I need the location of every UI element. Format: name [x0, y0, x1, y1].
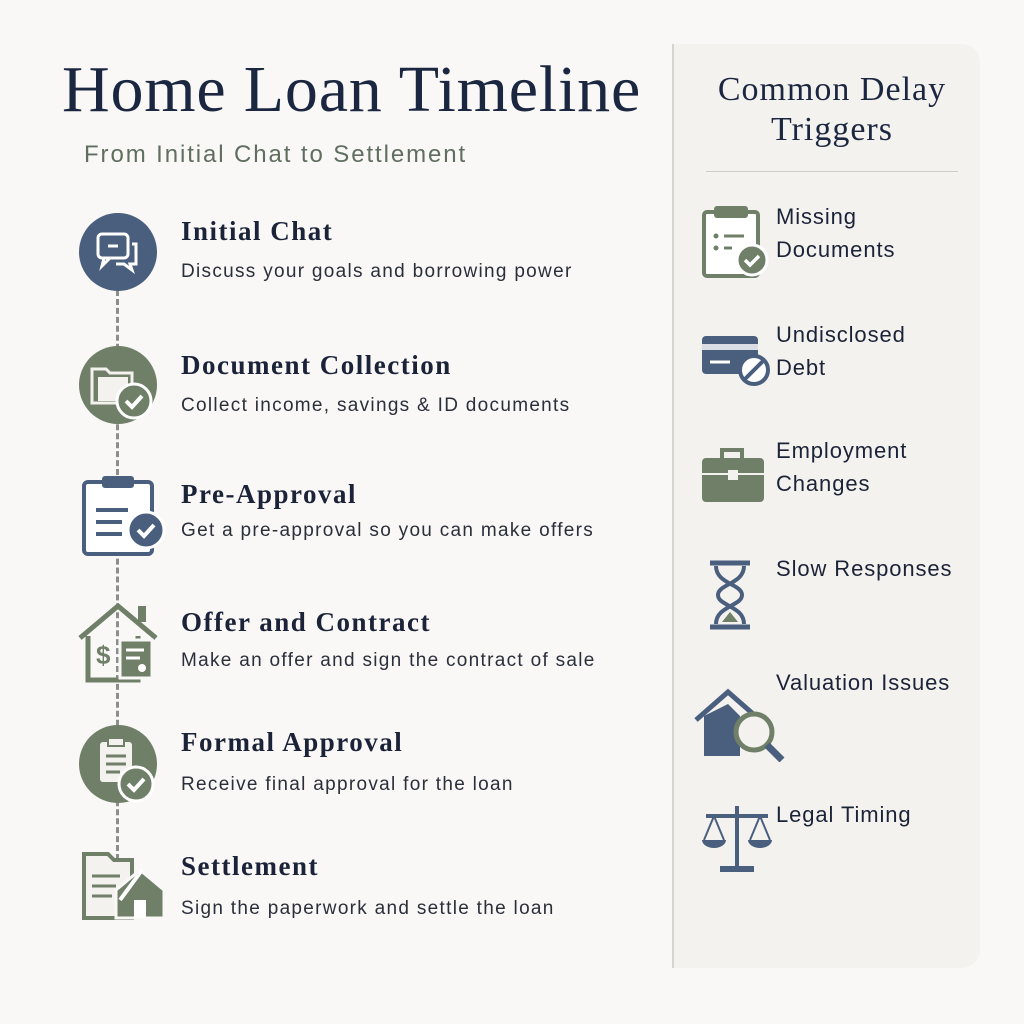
icon: house with dollar	[78, 602, 158, 682]
step: initial chat: Discuss your goals and borrowing power	[181, 261, 573, 282]
step: settlement: Sign the paperwork and settle the loan	[181, 898, 555, 919]
panel heading: Common Delay	[718, 71, 946, 108]
step: pre-approval	[82, 476, 594, 556]
step: formal approval	[79, 725, 514, 803]
trigger: slow responses: Slow Responses	[776, 556, 952, 581]
trigger: undisclosed debt	[702, 322, 906, 386]
step: offer and contract: Offer and Contract	[181, 607, 431, 637]
step: pre-approval: Pre-Approval	[181, 479, 357, 509]
icon: clipboard	[702, 206, 768, 278]
trigger: undisclosed debt: Debt	[776, 355, 826, 380]
icon: briefcase	[702, 448, 764, 502]
trigger: legal timing	[702, 802, 912, 872]
icon: hourglass	[710, 560, 750, 630]
step: settlement: Settlement	[181, 851, 319, 881]
trigger: employment changes	[702, 438, 907, 502]
step: offer and contract: Make an offer and sign the contract of sale	[181, 650, 596, 671]
step: offer and contract	[78, 602, 596, 682]
trigger: missing documents: Missing	[776, 204, 857, 229]
icon: document check	[79, 725, 157, 803]
icon: scales	[702, 806, 772, 872]
title: Home Loan Timeline	[62, 53, 641, 126]
step: document collection	[79, 346, 570, 424]
panel: common delay triggers	[672, 44, 980, 968]
icon: card with block	[702, 336, 770, 386]
icon: house with dollar: $	[96, 640, 111, 670]
icon: house with magnifier	[694, 688, 784, 762]
trigger: slow responses	[710, 556, 952, 630]
step: document collection: Document Collection	[181, 350, 452, 380]
step: document collection: Collect income, savings & ID documents	[181, 395, 570, 416]
icon: folder check	[79, 346, 157, 424]
trigger: legal timing: Legal Timing	[776, 802, 912, 827]
trigger: missing documents: Documents	[776, 237, 895, 262]
panel heading	[718, 71, 946, 148]
step: initial chat: Initial Chat	[181, 216, 333, 246]
step: settlement	[82, 851, 555, 920]
timeline connector	[116, 290, 119, 860]
icon: chat	[79, 213, 157, 291]
icon: clipboard check	[82, 476, 162, 556]
trigger: employment changes: Changes	[776, 471, 870, 496]
trigger: employment changes: Employment	[776, 438, 907, 463]
panel heading: Triggers	[771, 111, 893, 148]
icon: papers and house	[82, 852, 162, 920]
step: formal approval: Formal Approval	[181, 727, 403, 757]
subtitle: From Initial Chat to Settlement	[84, 141, 467, 168]
step: initial chat	[79, 213, 573, 291]
trigger: valuation issues: Valuation Issues	[776, 670, 950, 695]
trigger: valuation issues	[694, 670, 950, 762]
step: formal approval: Receive final approval for the loan	[181, 774, 514, 795]
step: pre-approval: Get a pre-approval so you can make offers	[181, 520, 594, 541]
trigger: undisclosed debt: Undisclosed	[776, 322, 906, 347]
trigger: missing documents	[702, 204, 895, 278]
